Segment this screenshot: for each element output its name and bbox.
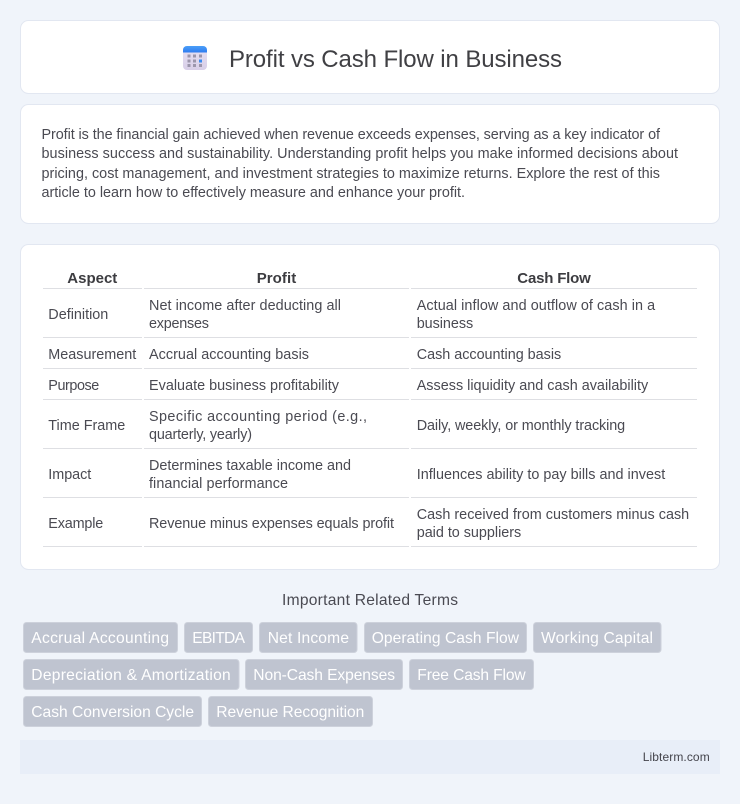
intro paragraph: article to learn how to effectively measure and enhance your profit. xyxy=(42,185,465,201)
intro paragraph: business success and sustainability. Understanding profit helps you make informed decisions about xyxy=(42,146,678,162)
tag: Working Capital: Working Capital xyxy=(541,630,653,647)
table header row: Aspect xyxy=(67,270,117,287)
related terms heading: Important Related Terms xyxy=(282,592,458,609)
row: time frame: Specific accounting period (e.g., xyxy=(149,409,367,425)
tag: EBITDA xyxy=(184,622,252,652)
row: example: paid to suppliers xyxy=(417,525,521,541)
row: impact: Influences ability to pay bills and invest xyxy=(417,467,665,483)
footer credit: Libterm.com xyxy=(643,750,710,764)
tag: Cash Conversion Cycle xyxy=(24,696,202,726)
tag: Net Income xyxy=(260,622,357,652)
panel: intro xyxy=(20,104,720,224)
tag: Depreciation & Amortization: Depreciation & Amortization xyxy=(31,667,231,684)
tag: Non-Cash Expenses: Non-Cash Expenses xyxy=(253,667,395,684)
row: time frame: quarterly, yearly) xyxy=(149,427,252,443)
intro paragraph: pricing, cost management, and investment strategies to maximize returns. Explore the rest of this xyxy=(42,166,660,182)
row: example: Revenue minus expenses equals profit xyxy=(149,516,394,532)
row: purpose xyxy=(48,378,649,394)
table rules xyxy=(43,288,697,547)
tag: Cash Conversion Cycle: Cash Conversion Cycle xyxy=(31,704,194,721)
row: purpose: Purpose xyxy=(48,378,99,394)
tag: Revenue Recognition: Revenue Recognition xyxy=(216,704,364,721)
row: measurement: Cash accounting basis xyxy=(417,347,561,363)
table header row: Profit xyxy=(257,270,296,287)
row: definition: expenses xyxy=(149,316,209,332)
row: time frame xyxy=(48,409,625,443)
tag: Free Cash Flow: Free Cash Flow xyxy=(417,667,526,684)
intro paragraph: Profit is the financial gain achieved when revenue exceeds expenses, serving as a key indicator of xyxy=(42,127,661,143)
icon: calendar xyxy=(183,46,207,70)
tag: Net Income: Net Income xyxy=(268,630,349,647)
row: definition: Actual inflow and outflow of cash in a xyxy=(417,298,655,314)
tag: Operating Cash Flow xyxy=(364,622,526,652)
row: impact xyxy=(48,458,665,492)
row: impact: Determines taxable income and xyxy=(149,458,351,474)
row: impact: financial performance xyxy=(149,476,288,492)
row: time frame: Time Frame xyxy=(48,418,125,434)
row: definition xyxy=(48,298,655,332)
row: purpose: Assess liquidity and cash availability xyxy=(417,378,649,394)
related terms tags xyxy=(24,622,661,726)
tag: EBITDA: EBITDA xyxy=(192,630,246,647)
table header row: Cash Flow xyxy=(517,270,591,287)
title: Profit vs Cash Flow in Business xyxy=(229,46,562,73)
row: purpose: Evaluate business profitability xyxy=(149,378,340,394)
row: time frame: Daily, weekly, or monthly tracking xyxy=(417,418,625,434)
row: example xyxy=(48,507,689,541)
header panel xyxy=(20,20,720,94)
row: impact: Impact xyxy=(48,467,91,483)
tag: Operating Cash Flow: Operating Cash Flow xyxy=(372,630,520,647)
footer bar xyxy=(20,740,720,774)
tag: Depreciation & Amortization xyxy=(24,660,239,690)
row: definition: business xyxy=(417,316,473,332)
row: definition: Net income after deducting all xyxy=(149,298,341,314)
row: measurement: Accrual accounting basis xyxy=(149,347,309,363)
tag: Free Cash Flow xyxy=(410,660,534,690)
row: definition: Definition xyxy=(48,307,108,323)
row: example: Cash received from customers minus cash xyxy=(417,507,689,523)
row: measurement: Measurement xyxy=(48,347,136,363)
table header row xyxy=(67,270,591,287)
tag: Accrual Accounting: Accrual Accounting xyxy=(31,630,169,647)
tag: Accrual Accounting xyxy=(24,622,178,652)
intro paragraph xyxy=(42,127,678,201)
panel: comparison table xyxy=(20,244,720,570)
tag: Non-Cash Expenses xyxy=(246,660,402,690)
tag: Working Capital xyxy=(534,622,661,652)
row: measurement xyxy=(48,347,561,363)
tag: Revenue Recognition xyxy=(208,696,372,726)
row: example: Example xyxy=(48,516,103,532)
